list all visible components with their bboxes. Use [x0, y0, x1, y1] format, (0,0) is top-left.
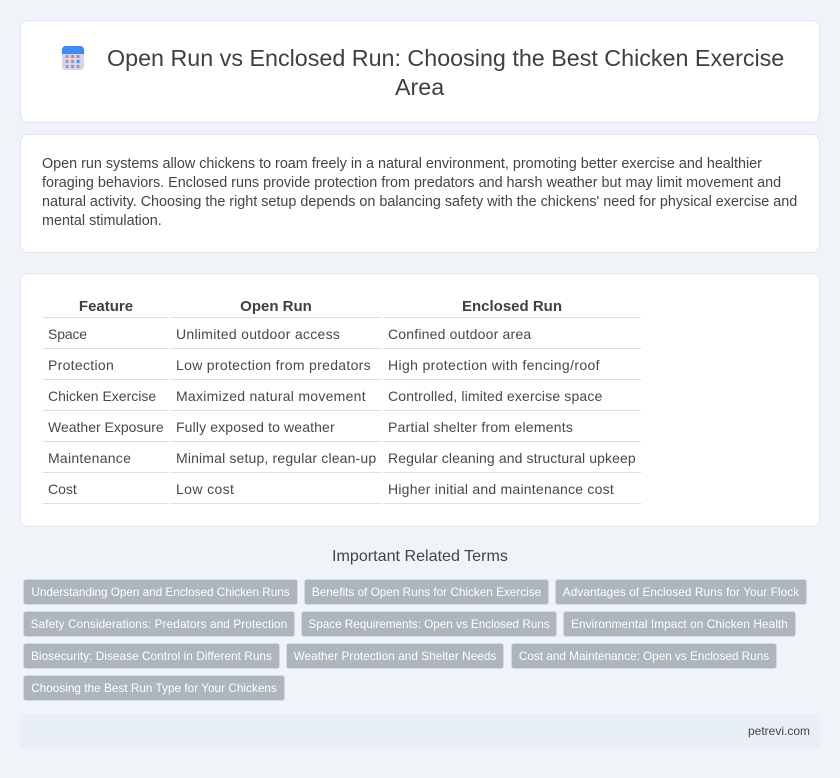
- row: cost: Cost: [48, 481, 77, 497]
- intro text: mental stimulation.: [42, 213, 162, 229]
- tag: Space Requirements: Open vs Enclosed Runs: [308, 617, 550, 631]
- tag: Safety Considerations: Predators and Protection: [31, 617, 287, 631]
- tag: Choosing the Best Run Type for Your Chickens: [31, 681, 277, 695]
- intro text: Open run systems allow chickens to roam freely in a natural environment, promoting better exercise and healthier: [42, 156, 762, 172]
- related terms heading: Important Related Terms: [332, 547, 508, 565]
- footer brand: petrevi.com: [748, 724, 810, 738]
- tag: Cost and Maintenance: Open vs Enclosed Runs: [519, 649, 769, 663]
- panel: comparison table: Open Run: [240, 298, 312, 315]
- panel: intro: [20, 134, 820, 253]
- panel: comparison table: Fully exposed to weather: [176, 419, 335, 435]
- tag: [511, 643, 777, 669]
- tag: [286, 643, 504, 669]
- tag: [23, 611, 295, 637]
- tag: Biosecurity: Disease Control in Different Runs: [31, 649, 272, 663]
- tag: [23, 579, 298, 605]
- row: protection: Protection: [48, 357, 114, 373]
- row: chicken exercise: Chicken Exercise: [48, 388, 156, 404]
- tag: [304, 579, 549, 605]
- tag: Advantages of Enclosed Runs for Your Flock: [563, 585, 799, 599]
- icon: calendar: [62, 46, 84, 70]
- row: maintenance: Maintenance: [48, 450, 131, 466]
- row: space: Space: [48, 326, 87, 342]
- panel: comparison table: High protection with fencing/roof: [388, 357, 600, 373]
- tag: Benefits of Open Runs for Chicken Exercise: [312, 585, 541, 599]
- tag: Understanding Open and Enclosed Chicken Runs: [31, 585, 290, 599]
- panel: comparison table: Confined outdoor area: [388, 326, 531, 342]
- panel: comparison table: Maximized natural movement: [176, 388, 366, 404]
- intro text: natural activity. Choosing the right setup depends on balancing safety with the chickens' need for physical exercise and: [42, 194, 797, 210]
- row: weather exposure: Weather Exposure: [48, 419, 164, 435]
- intro text: foraging behaviors. Enclosed runs provide protection from predators and harsh weather but may limit movement and: [42, 175, 781, 191]
- tag: [301, 611, 557, 637]
- panel: comparison table: Enclosed Run: [462, 298, 562, 315]
- panel: comparison table: Low cost: [176, 481, 234, 497]
- footer bar: [20, 714, 820, 748]
- panel: comparison table: Unlimited outdoor access: [176, 326, 340, 342]
- title: Area: [395, 74, 444, 100]
- tag: [23, 675, 285, 701]
- tag: [563, 611, 796, 637]
- panel: title card: [20, 20, 820, 123]
- title: Open Run vs Enclosed Run: Choosing the Best Chicken Exercise: [107, 45, 784, 71]
- tag: [23, 643, 280, 669]
- panel: comparison table: Controlled, limited exercise space: [388, 388, 602, 404]
- panel: comparison table: Low protection from predators: [176, 357, 371, 373]
- panel: comparison table: Minimal setup, regular clean-up: [176, 450, 376, 466]
- intro text: [42, 156, 797, 229]
- tag: [555, 579, 807, 605]
- panel: comparison table: [20, 273, 820, 527]
- panel: comparison table: Partial shelter from elements: [388, 419, 573, 435]
- panel: comparison table: Regular cleaning and structural upkeep: [388, 450, 636, 466]
- title: [107, 45, 784, 100]
- related term tags: [23, 579, 807, 701]
- tag: Environmental Impact on Chicken Health: [571, 617, 788, 631]
- table header: Feature: [79, 298, 133, 315]
- panel: comparison table: Higher initial and maintenance cost: [388, 481, 614, 497]
- tag: Weather Protection and Shelter Needs: [294, 649, 496, 663]
